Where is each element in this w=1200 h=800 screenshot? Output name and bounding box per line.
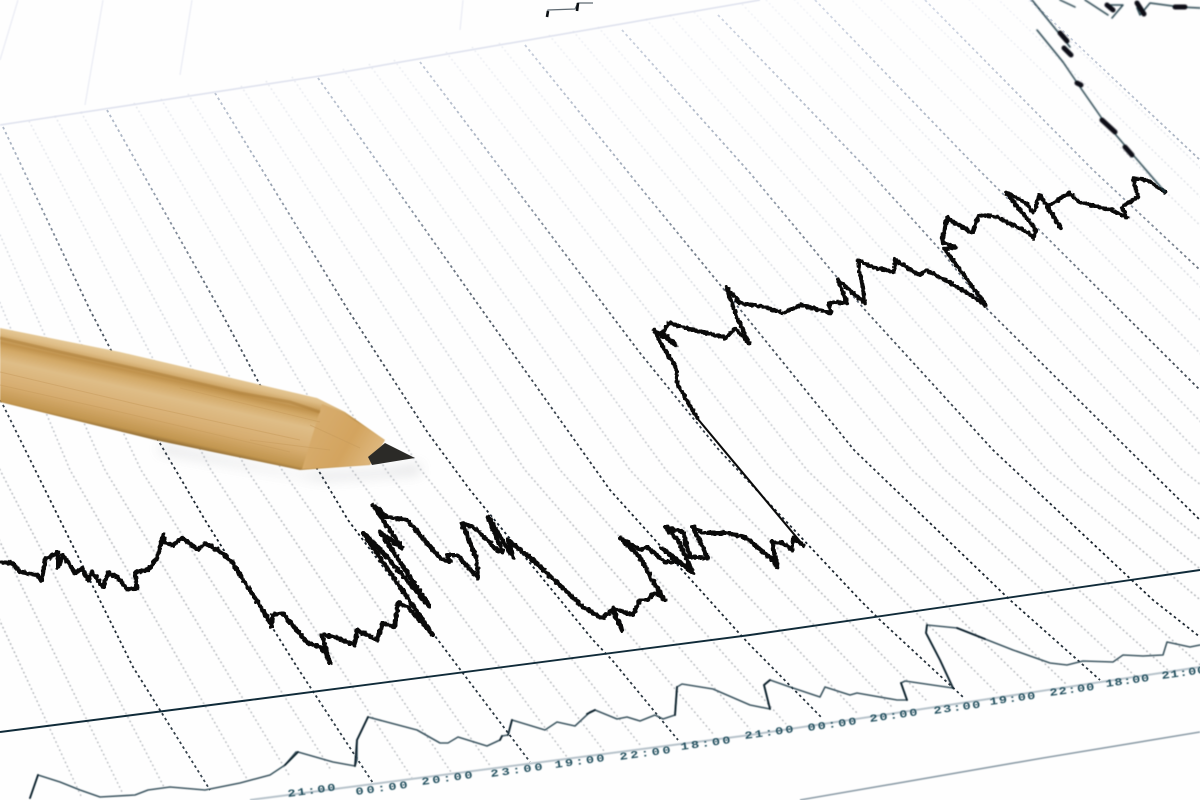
chart fragment above the border [547, 3, 593, 16]
time axis labels: 19:00 [989, 690, 1036, 708]
time axis labels: 22:00 [1049, 681, 1095, 699]
time axis labels: 18:00 [1105, 672, 1150, 690]
time axis labels: 21:00 [744, 724, 794, 742]
pencil sharpened cone [302, 404, 384, 469]
time axis labels: 21:00 [287, 782, 336, 800]
time axis labels: 22:00 [619, 744, 671, 763]
lower panel indicator line chart [30, 625, 1200, 798]
panel divider: lower panel top axis [0, 570, 1200, 732]
price line: middle section [654, 178, 1165, 418]
time axis labels: 19:00 [554, 752, 605, 771]
pencil body [0, 328, 385, 470]
pencil wood grain [0, 372, 360, 452]
lower panel time axis [250, 667, 1200, 800]
time axis labels: 20:00 [869, 707, 918, 725]
pencil facet ridge [0, 338, 320, 412]
time axis labels: 20:00 [421, 769, 473, 788]
chart upper border line [0, 0, 760, 125]
time axis labels: 00:00 [807, 716, 857, 734]
page bottom rule [800, 732, 1200, 800]
time axis labels: 23:00 [490, 761, 543, 780]
chart fragment dark ticks [547, 3, 578, 17]
price line: left section [0, 505, 803, 663]
time axis labels: 00:00 [355, 779, 408, 798]
time axis labels: 23:00 [933, 699, 981, 717]
price line: blurred upper right section [1032, 0, 1200, 192]
icon: wooden pencil [0, 328, 415, 470]
pencil lead tip [368, 443, 415, 465]
pencil shadow [160, 444, 420, 480]
time axis labels [287, 664, 1200, 800]
faint table lines above the chart [0, 0, 463, 105]
price line: straight steep section [697, 418, 803, 545]
time axis labels: 18:00 [680, 734, 731, 753]
